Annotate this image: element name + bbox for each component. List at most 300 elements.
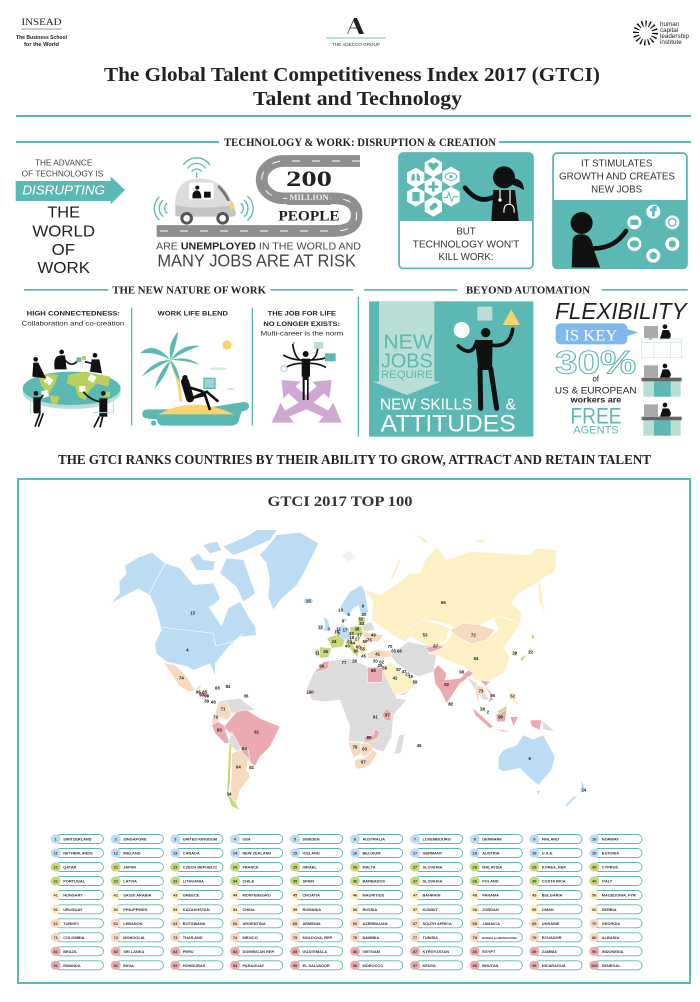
map labels: Eastern Hemisphere: 91 xyxy=(373,715,378,720)
text: unemployed xyxy=(156,241,361,271)
panel: new jobs new skills: JOBS xyxy=(381,350,433,372)
map labels: Eastern Hemisphere: 54 xyxy=(474,656,479,661)
logo: INSEAD xyxy=(16,17,67,48)
map labels: Eastern Hemisphere: 58 xyxy=(382,666,388,671)
ranks 71 to 80: BOSNIA & HERZEGOVINA xyxy=(482,936,517,940)
map labels: Eastern Hemisphere: 60 xyxy=(356,645,361,650)
ranks 81 to 90: ZAMBIA xyxy=(542,949,557,954)
map labels: Eastern Hemisphere: 38 xyxy=(355,627,360,632)
ranks 1 to 10: SWEDEN xyxy=(302,836,320,842)
map labels: Eastern Hemisphere: 66 xyxy=(397,649,402,654)
map labels: Eastern Hemisphere: 90 xyxy=(498,715,504,720)
ranks 11 to 20: ESTONIA xyxy=(602,850,619,856)
map labels: Eastern Hemisphere: 76 xyxy=(353,745,358,750)
ranks 81 to 90: EGYPT xyxy=(482,949,496,954)
ranks 51 to 60: CHINA xyxy=(242,907,255,912)
ranks 21 to 30: 27 xyxy=(413,864,417,870)
ranks 11 to 20: 15 xyxy=(293,850,298,856)
map labels: Americas: 34 xyxy=(227,792,232,797)
panel: GTCI 2017 top 100 xyxy=(18,479,690,983)
stat: 30 percent free agents: FREE xyxy=(570,403,621,428)
ranks 21 to 30: 30 xyxy=(592,864,596,870)
ranks 21 to 30 xyxy=(51,862,642,872)
ranks 1 to 10: 7 xyxy=(414,836,416,842)
ranks 61 to 70: BOTSWANA xyxy=(183,921,206,926)
ranks 51 to 60: OMAN xyxy=(542,907,554,912)
ranks 31 to 40: BARBADOS xyxy=(362,878,385,884)
ranks 11 to 20: BELGIUM xyxy=(362,850,380,856)
map labels: Americas: 68 xyxy=(215,686,220,691)
ranks 71 to 80: MONGOLIA xyxy=(123,935,145,940)
map labels: Eastern Hemisphere: 17 xyxy=(343,628,348,633)
ranks 31 to 40: 39 xyxy=(532,878,537,884)
ranks 41 to 50: PANAMA xyxy=(482,892,499,898)
map labels: Eastern Hemisphere: 24 xyxy=(332,639,337,644)
ranks 51 to 60: 57 xyxy=(413,907,417,912)
ranks 31 to 40 xyxy=(51,876,642,886)
map labels: Eastern Hemisphere: 3 xyxy=(327,627,330,632)
text: but technology won't kill work xyxy=(413,226,519,263)
illustration: people around a globe xyxy=(23,350,121,427)
ranks 1 to 10: FINLAND xyxy=(542,836,559,842)
ranks 41 to 50: 49 xyxy=(532,892,537,898)
map labels: Eastern Hemisphere: 87 xyxy=(433,644,439,649)
ranks 51 to 60: SERBIA xyxy=(602,907,617,912)
ranks 91 to 100: 93 xyxy=(173,963,178,968)
map labels: Eastern Hemisphere: 21 xyxy=(405,672,411,677)
stat: 30 percent free agents: workers are xyxy=(570,395,622,404)
ranks 51 to 60: 58 xyxy=(473,907,478,912)
ranks 51 to 60: 53 xyxy=(173,907,178,912)
icon: person with social media xyxy=(571,205,679,269)
ranks 51 to 60: ROMANIA xyxy=(302,907,321,912)
map labels: Eastern Hemisphere: 14 xyxy=(582,787,587,792)
panel: new jobs new skills: NEW SKILLS xyxy=(380,396,472,413)
road xyxy=(157,161,360,231)
map labels: Eastern Hemisphere: 49 xyxy=(371,632,376,637)
ranks 1 to 10: AUSTRALIA xyxy=(362,836,385,842)
map labels: Americas: 84 xyxy=(226,684,231,689)
ranks 71 to 80: 73 xyxy=(173,935,178,940)
ranks 91 to 100 xyxy=(51,961,642,970)
ranks 91 to 100: 99 xyxy=(532,963,537,968)
ranks 31 to 40: 40 xyxy=(592,878,596,884)
map labels: Eastern Hemisphere: 23 xyxy=(347,639,352,644)
text: work life blend: WORK LIFE BLEND xyxy=(158,310,228,317)
ranks 21 to 30: 24 xyxy=(233,864,238,870)
panel: disruption and unemployment xyxy=(16,158,361,277)
text: job for life: Multi-career is the norm xyxy=(261,330,344,337)
ranks 11 to 20 xyxy=(51,848,642,858)
text: the advance of technology xyxy=(22,159,103,179)
map labels: Americas: 39 xyxy=(204,698,210,703)
icon: medical hexagons xyxy=(407,157,460,217)
map labels: Eastern Hemisphere: 96 xyxy=(319,664,325,669)
icon: wireless signals xyxy=(154,158,253,221)
map labels: Eastern Hemisphere: 98 xyxy=(459,670,465,675)
ranks 11 to 20: 14 xyxy=(233,850,238,856)
ranks 11 to 20: 20 xyxy=(592,850,596,856)
stat: 30 percent free agents: 30% xyxy=(555,343,636,380)
ranks 31 to 40: LITHUANIA xyxy=(183,878,204,884)
ranks 31 to 40: CHILE xyxy=(242,878,255,884)
ranks 21 to 30: KOREA, REP. xyxy=(542,864,567,870)
map labels: Americas: 13 xyxy=(190,611,196,616)
ranks 21 to 30: MALAYSIA xyxy=(482,864,502,870)
ranks 11 to 20: AUSTRIA xyxy=(482,850,500,856)
ranks 81 to 90: PERU xyxy=(183,949,194,954)
text: the advance of technology: THE ADVANCE xyxy=(35,159,92,168)
ranks 21 to 30: SLOVENIA xyxy=(422,864,443,870)
ranks 41 to 50: 41 xyxy=(54,892,59,898)
ranks 11 to 20: IRELAND xyxy=(123,850,141,856)
ranks 91 to 100: EL SALVADOR xyxy=(302,963,330,968)
ranks 71 to 80: MOLDOVA, REP. xyxy=(302,935,333,940)
ranks 31 to 40: 34 xyxy=(233,878,238,884)
panel: new jobs new skills: & xyxy=(506,396,516,413)
text: high connectedness: HIGH CONNECTEDNESS: xyxy=(27,310,120,317)
ranks 81 to 90: GUATEMALA xyxy=(302,949,327,954)
logo: human capital leadership institute xyxy=(636,21,690,46)
ranks 91 to 100: PARAGUAY xyxy=(242,963,265,968)
ranks 51 to 60: KAZAKHSTAN xyxy=(183,907,210,912)
panels: technology cards xyxy=(399,153,687,269)
ranks 51 to 60: RUSSIA xyxy=(362,907,377,912)
ranks 71 to 80: ECUADOR xyxy=(542,935,562,940)
logo: human capital leadership institute: institute xyxy=(660,39,682,46)
ranks 91 to 100: RWANDA xyxy=(63,963,81,968)
map labels: Americas: 95 xyxy=(196,690,201,695)
ranks 91 to 100: 91 xyxy=(54,963,59,968)
map labels: Eastern Hemisphere: 43 xyxy=(349,631,354,636)
map labels: Eastern Hemisphere: 53 xyxy=(423,633,428,638)
ranks 1 to 10: 6 xyxy=(354,836,357,842)
ranks 1 to 10: SWITZERLAND xyxy=(63,836,92,842)
arrow: disrupting xyxy=(16,176,125,204)
ranks 91 to 100: 94 xyxy=(233,963,238,968)
section heading: technology and work: TECHNOLOGY & WORK: DISRUPTION & CREATION xyxy=(224,135,496,149)
ranks 41 to 50: MAURITIUS xyxy=(362,892,385,898)
ranks 61 to 70: JAMAICA xyxy=(482,921,500,926)
ranks 61 to 70 xyxy=(51,919,642,928)
ranks 21 to 30: 21 xyxy=(54,864,59,870)
text: it stimulates growth xyxy=(559,159,675,195)
heading: GTCI ranks countries: THE GTCI RANKS COUNTRIES BY THEIR ABILITY TO GROW, ATTRACT AND RETAIN TALENT xyxy=(58,452,651,467)
ranks 41 to 50: 47 xyxy=(413,892,417,898)
ranks 71 to 80: THAILAND xyxy=(183,935,203,940)
map labels: Eastern Hemisphere: 37 xyxy=(357,633,362,638)
ranks 81 to 90: 82 xyxy=(114,949,119,954)
section heading: new nature of work: THE NEW NATURE OF WORK xyxy=(112,285,266,297)
map labels: Eastern Hemisphere: 80 xyxy=(354,649,359,654)
ranks 41 to 50 xyxy=(51,890,642,900)
map labels: Eastern Hemisphere: 97 xyxy=(385,712,390,717)
text: job for life xyxy=(261,310,344,337)
map labels: Eastern Hemisphere: 62 xyxy=(379,659,385,664)
map labels: Eastern Hemisphere: 67 xyxy=(361,760,366,765)
ranks 21 to 30: CZECH REPUBLIC xyxy=(183,864,217,870)
panel: technology won't kill work xyxy=(399,153,533,268)
text: high connectedness: Collaboration and co-creation xyxy=(22,320,125,327)
ranks 81 to 90: DOMINICAN REP. xyxy=(242,949,275,954)
text: 200 million people: MILLION xyxy=(289,193,329,202)
ranks 1 to 10: NORWAY xyxy=(602,836,619,842)
panel: new jobs new skills: REQUIRE xyxy=(381,369,433,381)
ranks 31 to 40: 33 xyxy=(173,878,178,884)
ranks 71 to 80: ALBANIA xyxy=(602,935,619,940)
text: but technology won't kill work: BUT xyxy=(456,226,476,237)
map labels: Americas: 51 xyxy=(249,765,255,770)
text: the world of work xyxy=(32,205,95,277)
ranks 1 to 10: 9 xyxy=(533,836,536,842)
panel: stimulates growth xyxy=(553,153,687,269)
title xyxy=(104,64,600,110)
ranks 1 to 10: 5 xyxy=(294,836,297,842)
ranks 51 to 60: 52 xyxy=(114,907,119,912)
map labels: Eastern Hemisphere: 25 xyxy=(378,663,383,668)
map labels: Eastern Hemisphere: 55 xyxy=(360,647,366,652)
ranks 41 to 50: CROATIA xyxy=(302,892,320,898)
map labels: Eastern Hemisphere: 45 xyxy=(361,653,367,658)
text: the world of work: THE xyxy=(47,205,80,222)
ranks 61 to 70: 69 xyxy=(532,921,537,926)
ranks 81 to 90: KYRGYZSTAN xyxy=(422,949,449,954)
ranks 51 to 60: KUWAIT xyxy=(422,907,438,912)
ranks 21 to 30: JAPAN xyxy=(123,864,136,870)
map labels: Eastern Hemisphere: 33 xyxy=(359,621,365,626)
ranks 71 to 80: MEXICO xyxy=(242,935,258,940)
ranks 51 to 60: 56 xyxy=(353,907,358,912)
text: the world of work: WORK xyxy=(37,260,90,277)
map labels: Americas: 64 xyxy=(236,765,241,770)
text: the world of work: WORLD xyxy=(32,224,95,241)
ranks 61 to 70: 66 xyxy=(353,921,358,926)
logo: human capital leadership institute: capital xyxy=(660,27,678,34)
callout: is key xyxy=(556,323,638,345)
text: 200 million people xyxy=(278,166,340,224)
ranks 21 to 30: 28 xyxy=(473,864,478,870)
ranks 61 to 70: UKRAINE xyxy=(542,921,560,926)
callout: is key: IS KEY xyxy=(564,328,617,345)
text: job for life: NO LONGER EXISTS: xyxy=(263,321,340,328)
ranks 51 to 60: 60 xyxy=(592,907,596,912)
text: 200 million people: PEOPLE xyxy=(278,208,340,224)
map labels: Eastern Hemisphere: 7 xyxy=(338,631,341,636)
map labels: Eastern Hemisphere: 28 xyxy=(480,706,486,711)
map labels: Eastern Hemisphere: 70 xyxy=(388,644,393,649)
panel: new nature of work xyxy=(22,285,359,437)
map labels: Americas: 83 xyxy=(217,727,222,732)
map labels: Americas: 94 xyxy=(242,746,247,751)
ranks 21 to 30: FRANCE xyxy=(242,864,259,870)
ranks 1 to 10: 2 xyxy=(115,836,118,842)
logo: human capital leadership institute: human xyxy=(660,21,680,28)
logo: INSEAD: INSEAD xyxy=(22,17,62,27)
ranks 61 to 70: 61 xyxy=(54,921,59,926)
ranks 71 to 80: 80 xyxy=(592,935,596,940)
ranks 1 to 10: SINGAPORE xyxy=(123,836,147,842)
map labels: Americas: 48 xyxy=(211,699,216,704)
ranks 51 to 60: JORDAN xyxy=(482,907,499,912)
ranks 51 to 60: 54 xyxy=(233,907,238,912)
panel: beyond automation xyxy=(364,285,689,438)
map labels: Eastern Hemisphere: 8 xyxy=(342,618,345,623)
map labels: Eastern Hemisphere: 59 xyxy=(413,680,418,685)
ranks 41 to 50: 46 xyxy=(353,892,358,898)
map labels: Eastern Hemisphere: 86 xyxy=(490,693,496,698)
ranks 11 to 20: 17 xyxy=(413,850,417,856)
text: the world of work: OF xyxy=(52,242,75,259)
map labels: Eastern Hemisphere: 65 xyxy=(391,649,397,654)
ranks 51 to 60: URUGUAY xyxy=(63,907,83,912)
ranks 31 to 40: POLAND xyxy=(482,878,499,884)
map labels: Eastern Hemisphere: 27 xyxy=(355,637,360,642)
ranks 61 to 70: TURKEY xyxy=(63,921,80,926)
ranks 81 to 90: 90 xyxy=(592,949,596,954)
ranks 71 to 80: NAMIBIA xyxy=(362,935,379,940)
ranks 1 to 10: 1 xyxy=(55,836,58,842)
ranks 11 to 20: 16 xyxy=(353,850,358,856)
map labels: Eastern Hemisphere: 9 xyxy=(362,603,365,608)
ranks 91 to 100: INDIA xyxy=(123,963,134,968)
ranks 91 to 100: SENEGAL xyxy=(602,963,621,968)
ranks 41 to 50: GREECE xyxy=(183,892,200,898)
ranks 81 to 90: 89 xyxy=(532,949,537,954)
ranks 31 to 40: SLOVAKIA xyxy=(422,878,443,884)
ranking list: top 100 countries xyxy=(51,834,642,970)
map labels: Eastern Hemisphere: 19 xyxy=(408,674,414,679)
ranks 1 to 10 xyxy=(51,834,642,844)
map labels: Eastern Hemisphere: 10 xyxy=(338,608,344,613)
ranks 11 to 20: GERMANY xyxy=(422,850,443,856)
ranks 81 to 90: 81 xyxy=(54,949,59,954)
illustration: person at crossroads xyxy=(272,342,342,423)
ranks 71 to 80: 71 xyxy=(54,935,59,940)
ranks 11 to 20: NEW ZEALAND xyxy=(242,850,271,856)
logo: INSEAD: for the World xyxy=(24,42,59,48)
logo: The Adecco Group xyxy=(326,18,386,47)
text: unemployed: ARE UNEMPLOYED IN THE WORLD AND xyxy=(156,241,361,252)
map labels: Eastern Hemisphere: 63 xyxy=(362,746,368,751)
ranks 21 to 30: 25 xyxy=(293,864,298,870)
map labels: Eastern Hemisphere: 52 xyxy=(510,693,516,698)
section heading: beyond automation: BEYOND AUTOMATION xyxy=(466,285,590,297)
text: it stimulates growth: IT STIMULATES xyxy=(581,159,652,170)
map labels: Eastern Hemisphere: 77 xyxy=(342,660,347,665)
text: the advance of technology: OF TECHNOLOGY IS xyxy=(22,170,103,179)
ranks 41 to 50: SAUDI ARABIA xyxy=(123,892,152,898)
ranks 71 to 80: 77 xyxy=(413,935,417,940)
ranks 21 to 30: 22 xyxy=(114,864,119,870)
ranks 21 to 30: QATAR xyxy=(63,864,77,870)
map labels: Eastern Hemisphere: 42 xyxy=(393,676,398,681)
ranks 1 to 10: DENMARK xyxy=(482,836,502,842)
ranks 91 to 100: 92 xyxy=(114,963,119,968)
map labels: Eastern Hemisphere: 31 xyxy=(315,651,320,656)
map labels: Eastern Hemisphere: 15 xyxy=(306,598,311,603)
ranks 81 to 90: SRI LANKA xyxy=(123,949,145,954)
ranks 71 to 80: 78 xyxy=(473,935,478,940)
ranks 1 to 10: 8 xyxy=(474,836,477,842)
ranks 11 to 20: CANADA xyxy=(183,850,200,856)
ranks 21 to 30: ISRAEL xyxy=(302,864,317,870)
ranks 71 to 80: 75 xyxy=(293,935,298,940)
text: it stimulates growth: NEW JOBS xyxy=(591,184,642,195)
ranks 61 to 70: ARGENTINA xyxy=(242,921,266,926)
ranks 21 to 30: MALTA xyxy=(362,864,376,870)
ranks 41 to 50: BAHRAIN xyxy=(422,892,441,898)
map labels: Eastern Hemisphere: 18 xyxy=(349,635,355,640)
map labels: Eastern Hemisphere xyxy=(306,598,587,792)
map labels: Eastern Hemisphere: 46 xyxy=(417,743,422,748)
icon: desks xyxy=(642,324,682,436)
ranks 91 to 100: 100 xyxy=(591,963,598,968)
ranks 91 to 100: MOROCCO xyxy=(362,963,383,968)
ranks 51 to 60: 51 xyxy=(54,907,59,912)
ranks 61 to 70: SOUTH AFRICA xyxy=(422,921,452,926)
ranks 31 to 40: COSTA RICA xyxy=(542,878,566,884)
map labels: Eastern Hemisphere: 73 xyxy=(479,689,484,694)
ranks 81 to 90: VIETNAM xyxy=(362,949,380,954)
ranks 51 to 60: 55 xyxy=(293,907,298,912)
map labels: Eastern Hemisphere: 22 xyxy=(528,650,534,655)
arrow: disrupting: DISRUPTING xyxy=(22,183,105,197)
ranks 81 to 90: BRAZIL xyxy=(63,949,78,954)
map labels: Americas: 74 xyxy=(179,675,184,680)
ranks 1 to 10: USA xyxy=(242,836,251,842)
map labels: Eastern Hemisphere: 47 xyxy=(402,669,407,674)
ranks 61 to 70: 64 xyxy=(233,921,238,926)
map labels: Eastern Hemisphere: 89 xyxy=(367,735,372,740)
ranks 81 to 90: 85 xyxy=(293,949,298,954)
ranks 21 to 30: 26 xyxy=(353,864,358,870)
ranks 91 to 100: 95 xyxy=(293,963,298,968)
map labels: Eastern Hemisphere: 75 xyxy=(367,637,372,642)
ranks 81 to 90: 88 xyxy=(473,949,478,954)
ranks 41 to 50: 44 xyxy=(233,892,238,898)
ranks 41 to 50: MONTENEGRO xyxy=(242,892,271,898)
ranks 21 to 30: CYPRUS xyxy=(602,864,618,870)
ranks 11 to 20: U.A.E. xyxy=(542,850,553,856)
ranks 41 to 50: 50 xyxy=(592,892,596,898)
ranks 71 to 80: COLOMBIA xyxy=(63,935,85,940)
ranks 71 to 80: TUNISIA xyxy=(422,935,438,940)
icon: driverless car xyxy=(175,178,236,225)
ranks 61 to 70: 63 xyxy=(173,921,178,926)
text: unemployed: MANY JOBS ARE AT RISK xyxy=(157,251,356,271)
ranks 31 to 40: ITALY xyxy=(602,878,613,884)
ranks 41 to 50: MACEDONIA, FYR xyxy=(602,892,636,898)
text: but technology won't kill work: TECHNOLOGY WON'T xyxy=(413,239,519,250)
map: Europe, Africa, Asia, Oceania xyxy=(303,534,587,807)
text: 200 million people: 200 xyxy=(286,166,332,191)
ranks 31 to 40: SPAIN xyxy=(302,878,314,884)
map labels: Americas: 71 xyxy=(221,707,226,712)
logo: The Adecco Group: THE ADECCO GROUP xyxy=(332,42,380,47)
ranks 1 to 10: 10 xyxy=(592,836,596,842)
map labels: Americas: 81 xyxy=(254,730,260,735)
ranks 31 to 40: 37 xyxy=(413,878,417,884)
ranks 81 to 90: INDONESIA xyxy=(602,949,624,954)
icon: doctor xyxy=(465,166,524,221)
map labels: Eastern Hemisphere: 56 xyxy=(441,600,446,605)
map labels: Eastern Hemisphere: 57 xyxy=(396,667,402,672)
map heading: GTCI 2017 TOP 100 xyxy=(268,494,412,510)
map labels: Eastern Hemisphere: 11 xyxy=(336,626,342,631)
ranks 21 to 30: 29 xyxy=(532,864,537,870)
map labels: Americas: 36 xyxy=(244,693,249,698)
map labels: Eastern Hemisphere: 20 xyxy=(362,612,367,617)
